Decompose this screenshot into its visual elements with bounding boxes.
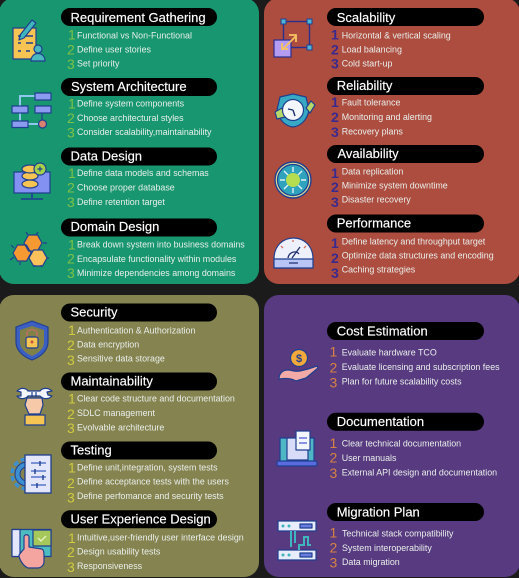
list: Disaster recovery [342,195,411,205]
list: Minimize dependencies among domains [77,268,236,278]
list: 1 [331,94,339,110]
heading pill: Documentation [337,414,424,429]
list: Define retention target [77,197,165,207]
section: System Architecture [12,78,217,140]
section: Documentation [277,413,497,481]
list: Evolvable architecture [77,422,164,432]
list: SDLC management [77,408,155,418]
heading pill: Maintainability [70,374,153,388]
list: Define unit,integration, system tests [77,463,218,473]
heading pill [61,148,217,166]
heading pill: Performance [337,216,411,230]
list: 1 [330,344,338,360]
list [331,94,432,140]
section: Testing [12,442,230,505]
heading pill [327,8,484,26]
list: Design usability tests [77,547,161,557]
icon: target wheel [275,162,311,198]
list: Break down system into business domains [77,240,245,250]
list: 2 [67,180,75,196]
list: 3 [331,194,339,210]
list [67,96,212,140]
list: 2 [67,406,75,422]
heading pill: Migration Plan [337,504,420,520]
icon: honeycomb [10,232,49,267]
list [330,524,454,570]
section: Requirement Gathering [13,8,217,72]
list: Define data models and schemas [77,168,209,178]
list: 2 [67,475,75,491]
list [67,459,230,505]
heading pill [327,214,484,232]
heading pill: Security [70,304,118,320]
list: System interoperability [342,543,432,553]
heading pill [61,442,217,460]
heading pill [327,77,484,95]
list: 1 [68,459,76,475]
list: Minimize system downtime [342,181,448,191]
icon: laptop with document [277,431,317,466]
icon: gauge [274,238,313,268]
list [67,322,195,368]
list: Evaluate hardware TCO [342,348,437,358]
panel: green design [0,0,259,284]
list: 3 [67,56,75,72]
list: Caching strategies [342,265,416,275]
icon: database monitor [14,163,50,199]
list [67,236,245,281]
list: 2 [67,250,75,266]
list: Data replication [342,166,403,176]
list: 1 [68,530,76,546]
list: Data encryption [77,340,139,350]
list: 2 [331,179,339,195]
icon: resize square [274,19,312,57]
list [331,26,451,72]
heading pill: Requirement Gathering [70,10,206,25]
heading pill [327,322,484,340]
list: Plan for future scalability costs [342,376,462,386]
list: Set priority [77,59,120,69]
list [331,165,448,210]
list: Define acceptance tests with the users [77,477,230,487]
list: 1 [68,390,76,406]
list: Horizontal & vertical scaling [342,30,451,40]
icon: hand with coin: $ [296,353,302,365]
list: 1 [68,236,76,252]
list: Functional vs Non-Functional [77,30,192,40]
heading pill: Availability [338,146,399,161]
heading pill [327,145,484,163]
heading pill: System Architecture [71,79,187,94]
list: Fault tolerance [342,98,400,108]
icon: clipboard with person [13,20,45,61]
list: 1 [68,165,76,181]
list [331,235,494,281]
list: Clear code structure and documentation [77,394,235,404]
heading pill [327,413,484,431]
heading pill [61,218,217,236]
list [67,390,235,436]
list [67,165,209,210]
icon: clock shield [275,94,315,127]
list: Consider scalability,maintainability [77,127,212,137]
list: 1 [68,96,76,112]
list: External API design and documentation [342,467,497,477]
list: 1 [331,235,339,251]
list: 1 [68,322,76,338]
heading pill: User Experience Design [70,512,211,526]
list: Define latency and throughput target [342,236,486,246]
list [330,344,500,390]
icon: hand with coin [279,350,318,381]
list: User manuals [342,453,397,463]
panel: red quality [264,0,519,284]
list: 2 [67,337,75,353]
icon: shield with lock [16,321,48,360]
list: 3 [331,265,339,281]
list: 2 [330,449,338,465]
list: Optimize data structures and encoding [342,251,494,261]
section: Availability [275,145,484,210]
icon: hand holding wrench [17,388,52,425]
list: Choose proper database [77,183,175,193]
icon: server migration [278,521,316,560]
list [330,435,497,481]
list: Intuitive,user-friendly user interface design [77,533,244,543]
heading pill: Domain Design [70,219,159,234]
section: Scalability [274,8,484,72]
list: 1 [68,26,76,42]
list: 2 [330,539,338,555]
list: Define user stories [77,45,152,55]
list: 3 [67,265,75,281]
list: Monitoring and alerting [342,112,432,122]
list: 3 [67,559,75,575]
list: Define perfomance and security tests [77,491,224,501]
section: Maintainability [17,372,235,436]
heading pill: Reliability [337,78,393,93]
list: 1 [331,165,339,181]
list: Cold start-up [342,59,393,69]
heading pill: Testing [70,442,112,458]
list: 3 [330,374,338,390]
section: Data Design [14,148,217,210]
list: Evaluate licensing and subscription fees [342,362,500,372]
section: Cost Estimation [279,322,500,390]
list: 2 [67,110,75,126]
list: Choose architectural styles [77,113,184,123]
list: 3 [67,194,75,210]
list [67,530,244,575]
panel: purple planning [264,295,519,577]
list: Load balancing [342,45,402,55]
list: Define system components [77,99,185,109]
section: User Experience Design [12,510,244,575]
list: 2 [330,359,338,375]
heading pill: Data Design [70,148,142,164]
list: Data migration [342,557,400,567]
section: Security [16,304,217,368]
list: 1 [330,435,338,451]
list: 3 [330,554,338,570]
list: 2 [331,42,339,58]
icon: architecture diagram [12,93,51,128]
section: Reliability [275,77,484,140]
list: Responsiveness [77,561,143,571]
list [67,26,192,72]
list: 3 [331,56,339,72]
list: 1 [331,26,339,42]
icon: touch interface [12,530,51,568]
list: 3 [67,420,75,436]
list: 1 [330,524,338,540]
section: Domain Design [10,218,245,281]
list: 2 [331,250,339,266]
list: 2 [67,544,75,560]
heading pill [61,78,217,96]
list: 3 [331,124,339,140]
list: 3 [67,352,75,368]
heading pill: Scalability [337,10,396,25]
list: 3 [330,465,338,481]
section: Performance [274,214,494,281]
panel: olive engineering [0,295,259,577]
heading pill [327,503,484,521]
list: Encapsulate functionality within modules [77,254,237,264]
list: 3 [67,124,75,140]
heading pill [61,372,217,390]
list: Sensitive data storage [77,354,165,364]
list: Recovery plans [342,126,403,136]
list: 3 [67,489,75,505]
heading pill: Cost Estimation [337,324,428,338]
list: 2 [331,109,339,125]
section: Migration Plan [278,503,484,570]
list: Clear technical documentation [342,439,461,449]
heading pill [61,304,217,322]
icon: gear and checklist [12,455,51,493]
list: Technical stack compatibility [342,528,454,538]
list: Authentication & Authorization [77,325,195,335]
list: 2 [67,42,75,58]
